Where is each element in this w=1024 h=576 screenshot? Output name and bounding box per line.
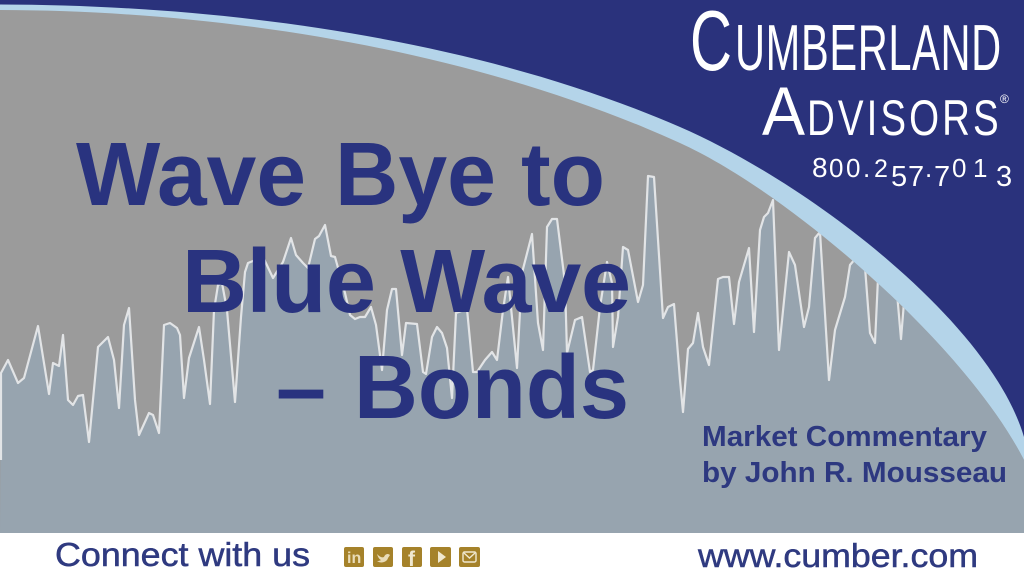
title: Bonds [354,338,629,438]
market commentary byline [702,421,1007,489]
social icons [344,547,480,571]
phone number: 0 [846,153,860,183]
logo: Cumberland Advisors: DVISORS [807,91,1002,146]
phone number: 0 [829,153,843,183]
connect with us text: Connect with us [55,536,310,573]
title [76,125,631,438]
title: Bye [335,125,496,225]
phone number: 8 [812,152,828,183]
market commentary byline: by John R. Mousseau [702,457,1007,489]
logo: Cumberland Advisors [690,0,1009,150]
phone number: 7 [934,161,950,193]
phone number: 2 [874,155,888,183]
footer band [0,533,1024,576]
website url: www.cumber.com [697,537,978,574]
phone number: . [863,153,870,183]
phone number: 0 [952,153,966,183]
title: Blue Wave [182,232,631,332]
title: Wave [76,125,306,225]
phone number: 5 [891,161,907,193]
title: to [521,125,605,225]
logo: Cumberland Advisors: A [762,73,805,150]
phone number: 7 [908,161,924,193]
logo: Cumberland Advisors: ® [1000,92,1009,106]
phone number: 1 [973,153,987,183]
title: – [276,338,326,438]
phone number: . [925,153,932,183]
icon: linkedin: in [347,550,361,567]
market commentary byline: Market Commentary [702,421,987,453]
logo: Cumberland Advisors: UMBERLAND [735,12,1002,84]
icon: email [459,547,480,567]
phone number: 3 [996,161,1012,193]
icon: play [430,547,451,567]
icon: twitter [373,547,393,567]
icon: facebook: f [408,548,416,571]
